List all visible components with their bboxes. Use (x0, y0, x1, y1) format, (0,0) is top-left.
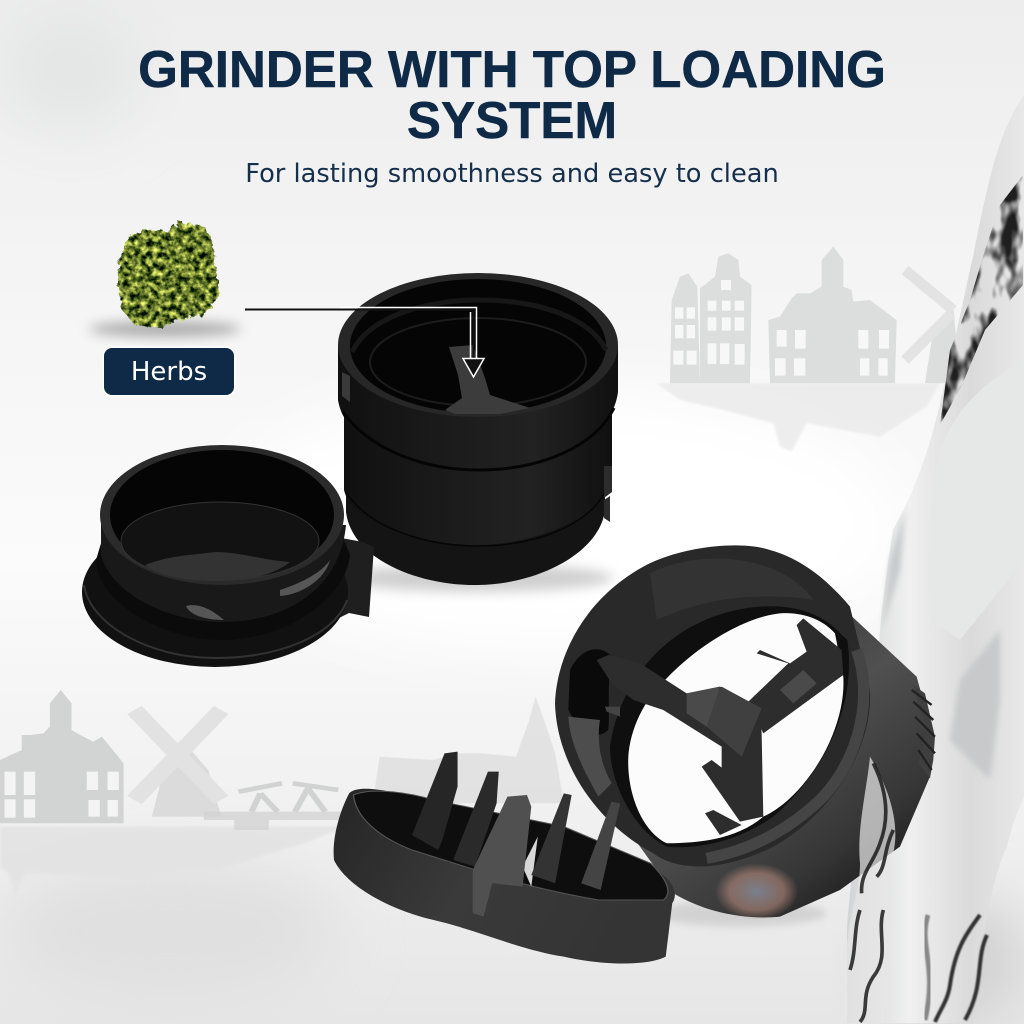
skyline: bottom left (0, 690, 564, 893)
icon: herb bud (89, 222, 241, 337)
title (138, 41, 886, 150)
skyline: top right (657, 247, 960, 452)
stacked grinder (338, 273, 618, 592)
water stream (847, 95, 1024, 1023)
callout line and arrow (245, 308, 484, 377)
label: herbs: Herbs (131, 357, 207, 387)
title: GRINDER WITH TOP LOADING (138, 41, 886, 99)
subtitle: For lasting smoothness and easy to clean (245, 159, 779, 189)
open grinder plate with pins (334, 752, 675, 964)
open lid (82, 445, 374, 667)
label: herbs (104, 348, 234, 395)
open grinder body with teeth (555, 545, 935, 1023)
title: SYSTEM (407, 92, 617, 150)
